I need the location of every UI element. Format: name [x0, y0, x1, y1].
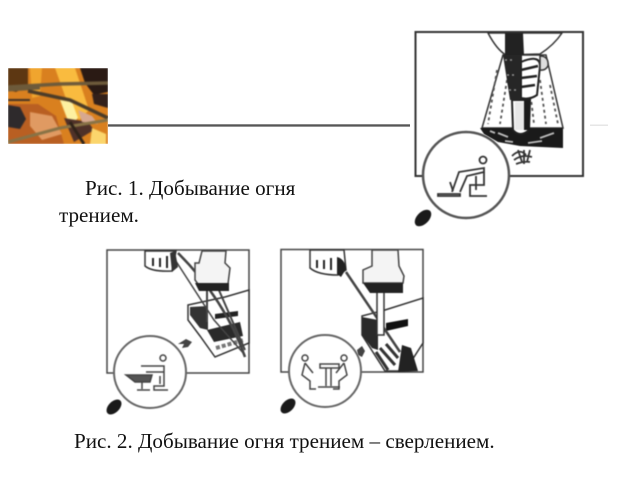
ground strip — [480, 128, 563, 148]
wood block — [188, 290, 249, 357]
frame — [281, 250, 423, 372]
wood block — [362, 298, 423, 371]
faint rule end — [590, 124, 608, 126]
figure 2a: bow drill illustration — [107, 250, 249, 373]
left fist — [310, 250, 346, 275]
figure 1: magnifier with pictogram — [412, 132, 509, 229]
handle — [278, 396, 298, 416]
tinder — [357, 346, 365, 357]
lens — [289, 335, 361, 407]
spindle — [377, 292, 384, 335]
spindle — [207, 288, 245, 350]
drill stick — [512, 100, 530, 134]
pictogram: two people at a table — [302, 355, 347, 389]
tinder pile — [512, 150, 532, 164]
bow — [172, 255, 245, 355]
figure 2b: magnifier with pictogram — [278, 335, 361, 416]
lens — [114, 336, 186, 408]
figure 1 caption: трением. — [59, 203, 139, 227]
figure 2b: two-handed drill illustration — [281, 250, 423, 372]
figure 1 caption: Рис. 1. Добывание огня — [85, 176, 296, 200]
figure 1: hand drill illustration — [416, 32, 583, 176]
handle — [412, 207, 434, 229]
arm and fist — [488, 33, 562, 55]
wooden board — [482, 55, 563, 128]
left fist — [145, 251, 176, 271]
bow string — [346, 272, 400, 352]
figure 2a: magnifier with pictogram — [104, 336, 186, 417]
pictogram: person at anvil — [126, 355, 168, 390]
pictogram: kneeling person — [438, 156, 487, 196]
right fist — [195, 251, 230, 284]
lens — [423, 132, 509, 218]
frame — [416, 32, 583, 176]
header rule — [108, 124, 410, 127]
frame — [107, 250, 249, 373]
tinder — [178, 339, 192, 348]
figure 2 caption: Рис. 2. Добывание огня трением – сверлением. — [74, 429, 495, 453]
right fist — [363, 250, 404, 283]
handle — [104, 397, 124, 417]
photo: campfire — [8, 68, 108, 144]
